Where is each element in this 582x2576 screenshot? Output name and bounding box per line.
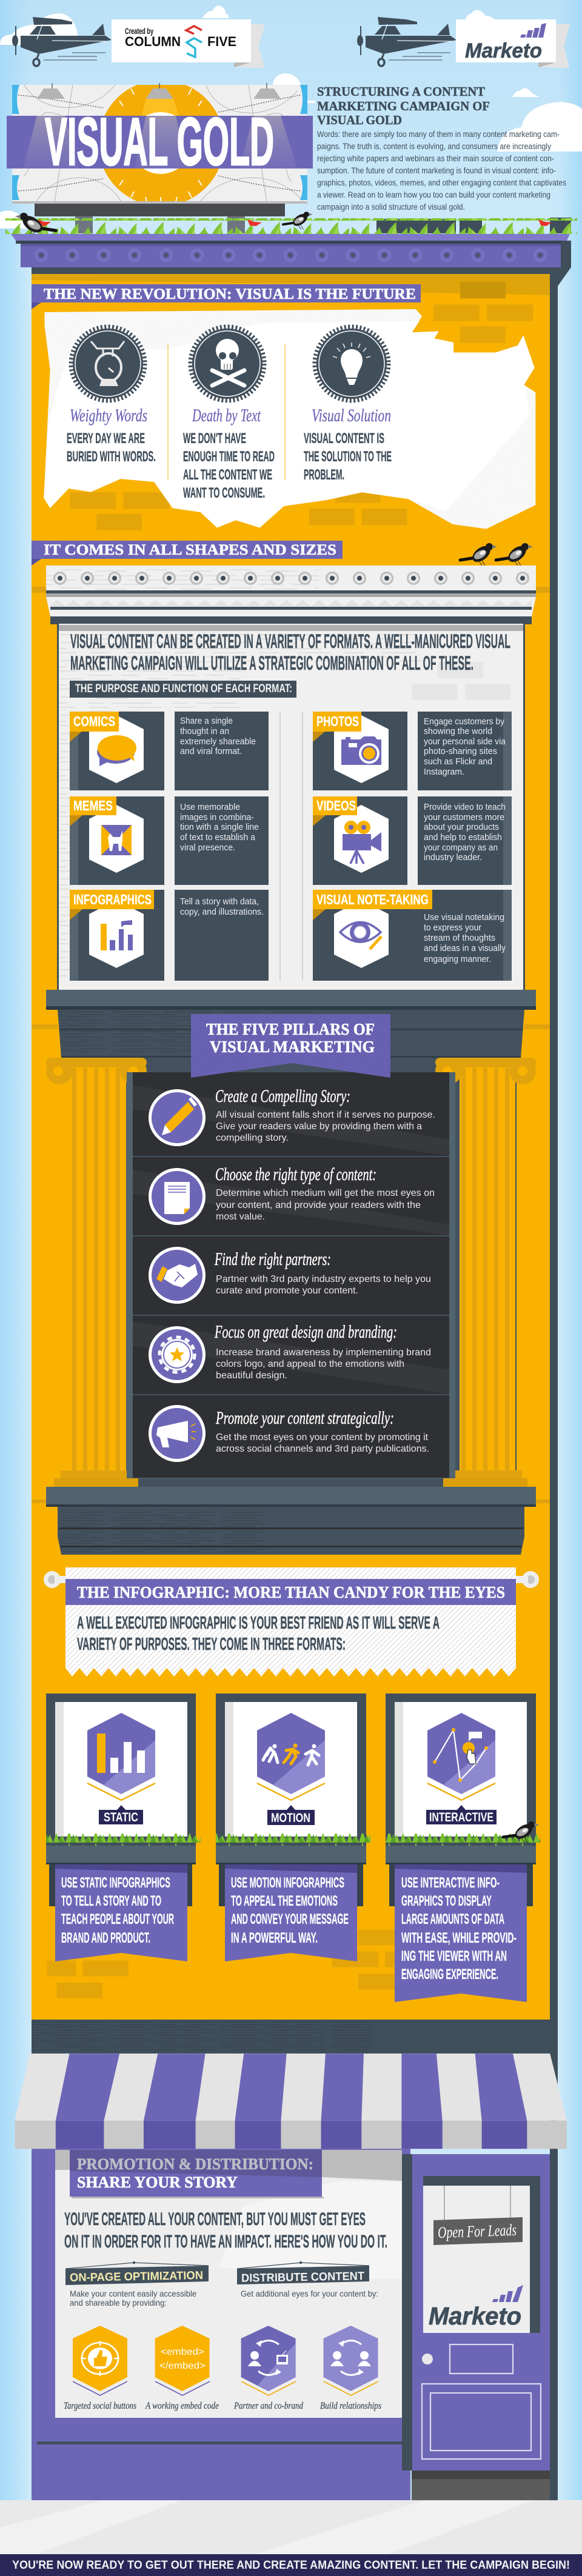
title band: [7, 104, 313, 179]
heading: the new revolution: [32, 284, 421, 309]
clouds: [0, 5, 582, 229]
panel: infographic scroll: [44, 1567, 539, 1677]
memes description: of text to establish a: [180, 832, 256, 843]
pillar 3 text: Partner with 3rd party industry experts to help you: [216, 1274, 431, 1284]
format: visual note-taking: Use visual notetaking: [424, 912, 504, 923]
badge: weighty words: [71, 327, 145, 401]
format: photos: [313, 712, 407, 790]
icon: megaphone: [150, 1406, 204, 1461]
pillars title banner: [191, 1014, 390, 1078]
pillar 2 text: most value.: [216, 1212, 265, 1222]
billboard map lines: [18, 85, 303, 202]
columns of copy: ALL THE CONTENT WE: [183, 467, 272, 483]
format: infographics: INFOGRAPHICS: [73, 892, 152, 907]
intro text: [317, 129, 566, 212]
rooftop boxes: [376, 218, 571, 233]
card: static: TEACH PEOPLE ABOUT YOUR: [61, 1911, 174, 1927]
format: comics: COMICS: [73, 713, 115, 729]
pillar 2 text: Choose the right type of content:: [215, 1164, 376, 1184]
Column Five logo: [125, 26, 236, 57]
script headings: [70, 405, 391, 425]
card: interactive: ING THE VIEWER WITH AN: [401, 1948, 507, 1964]
intro text: rejecting white papers and webinars as their main source of content con-: [317, 153, 554, 163]
photos description: photo-sharing sites: [424, 746, 497, 756]
flowers: [38, 219, 552, 227]
intro heading: [317, 84, 490, 127]
sidewalk: [0, 2500, 582, 2554]
hex: embed code: [145, 2326, 219, 2411]
panel: torn paper: [44, 309, 535, 529]
script headings: Visual Solution: [312, 405, 391, 425]
pillar 5 text: Get the most eyes on your content by promoting it: [216, 1432, 429, 1443]
panel: infographic scroll: THE INFOGRAPHIC: MORE THAN CANDY FOR THE EYES: [77, 1583, 505, 1601]
title band: VISUAL GOLD: [45, 104, 274, 179]
videos description: Provide video to teach: [424, 802, 506, 812]
badge: visual solution: [315, 327, 389, 401]
icon: document: [150, 1170, 204, 1223]
card: static: USE STATIC INFOGRAPHICS: [61, 1875, 170, 1891]
pillar 1 text: Give your readers value by providing them with a: [216, 1121, 422, 1132]
card: interactive: INTERACTIVE: [429, 1810, 493, 1824]
scroll rollers: [44, 1571, 539, 1588]
promotion heading: [70, 2150, 324, 2198]
bird on card: [503, 1821, 539, 1843]
photos description: showing the world: [424, 726, 492, 736]
on-page optimization: [65, 2261, 209, 2307]
videos description: your company as an: [424, 843, 498, 853]
intro text: campaign into a solid structure of visual gold.: [317, 202, 465, 212]
lamps: [37, 88, 281, 99]
pillar 3 text: curate and promote your content.: [216, 1286, 358, 1296]
pillar 4 text: beautiful design.: [216, 1370, 287, 1381]
door Marketo logo: Marketo: [429, 2302, 521, 2330]
hex: build relationships: [320, 2326, 381, 2411]
pillar 4 text: Focus on great design and branding:: [214, 1322, 397, 1342]
format: comics: [70, 712, 164, 790]
panel: five pillars board: [127, 1072, 455, 1478]
hex: social buttons: Targeted social buttons: [64, 2401, 136, 2411]
billboard: [7, 80, 313, 233]
pillar 2 text: your content, and provide your readers with the: [216, 1200, 421, 1210]
birds on ledge: [460, 543, 533, 567]
memes description: images in combina-: [180, 812, 254, 823]
intro heading: VISUAL GOLD: [317, 113, 402, 127]
closing banner: [0, 2554, 582, 2576]
columns of copy: VISUAL CONTENT IS: [304, 430, 384, 447]
card: interactive: ENGAGING EXPERIENCE.: [401, 1966, 498, 1983]
icon: handshake: [150, 1249, 204, 1302]
columns of copy: [67, 430, 392, 501]
distribute content: [237, 2261, 378, 2298]
columns of copy: BURIED WITH WORDS.: [67, 449, 156, 465]
on-page optimization: and shareable by providing:: [70, 2298, 167, 2307]
pillar 5 text: [215, 1408, 429, 1454]
Marketo logo: Marketo: [465, 39, 542, 62]
format: visual note-taking: engaging manner.: [424, 954, 491, 964]
format: photos: PHOTOS: [316, 713, 359, 729]
videos description: [418, 796, 512, 885]
on-page optimization: ON-PAGE OPTIMIZATION: [70, 2269, 203, 2284]
format: visual note-taking: to express your: [424, 923, 481, 933]
Marketo logo: [465, 23, 546, 62]
panel: shop window: [55, 2150, 402, 2418]
hex: embed code: </embed>: [159, 2361, 206, 2371]
pillar 4 text: Increase brand awareness by implementing brand: [216, 1347, 431, 1358]
facade rivets: [53, 572, 529, 585]
pillar 5 text: across social channels and 3rd party publications.: [216, 1444, 429, 1454]
hex: embed code: <embed>: [161, 2347, 204, 2357]
promotion heading: PROMOTION & DISTRIBUTION:: [77, 2155, 313, 2173]
icon: pencil: [150, 1091, 204, 1144]
card: motion: [216, 1693, 370, 1961]
roof cornice: [11, 234, 571, 286]
distribute content: DISTRIBUTE CONTENT: [241, 2270, 365, 2285]
heading: shapes and sizes: IT COMES IN ALL SHAPES AND SIZES: [44, 542, 336, 558]
pillar 1 text: [215, 1086, 435, 1143]
photos description: Engage customers by: [424, 716, 504, 727]
intro text: paigns. The truth is, content is evolving, and consumers are increasingly: [317, 141, 551, 151]
facade top: [32, 566, 550, 624]
format: memes: [70, 796, 164, 885]
format: videos: [313, 796, 407, 885]
photos description: Instagram.: [424, 767, 464, 777]
format: visual note-taking: VISUAL NOTE-TAKING: [316, 892, 429, 907]
columns of copy: WE DON'T HAVE: [183, 430, 246, 447]
gold sun: [103, 85, 219, 201]
script headings: Death by Text: [192, 405, 261, 425]
card: motion: AND CONVEY YOUR MESSAGE: [231, 1911, 349, 1927]
pillar 4 text: colors logo, and appeal to the emotions with: [216, 1359, 404, 1369]
awning: [15, 2054, 567, 2149]
plinth: [32, 1487, 550, 1555]
card: motion: USE MOTION INFOGRAPHICS: [231, 1875, 344, 1891]
card: motion: TO APPEAL THE EMOTIONS: [231, 1893, 338, 1909]
format: visual note-taking: stream of thoughts: [424, 933, 495, 943]
card: interactive: [386, 1693, 540, 2002]
plane with Column Five banner: [12, 17, 265, 68]
format: visual note-taking: [313, 890, 512, 981]
comics description: Share a single: [180, 716, 233, 726]
hex: partner and co-brand: Partner and co-brand: [233, 2401, 304, 2411]
videos description: about your products: [424, 822, 499, 832]
entablature: [32, 990, 550, 1504]
storefront: [15, 2020, 567, 2500]
pillar 3 text: [214, 1249, 431, 1296]
videos description: and help to establish: [424, 832, 502, 843]
promotion heading: SHARE YOUR STORY: [77, 2174, 238, 2191]
on-page optimization: Make your content easily accessible: [70, 2289, 196, 2298]
intro heading: MARKETING CAMPAIGN OF: [317, 99, 490, 113]
pillar 1 text: Create a Compelling Story:: [215, 1086, 350, 1106]
columns of copy: EVERY DAY WE ARE: [67, 430, 145, 447]
pillar 5 text: Promote your content strategically:: [215, 1408, 394, 1428]
memes description: [175, 796, 269, 885]
distribute content: Get additional eyes for your content by:: [241, 2289, 378, 2298]
comics description: and viral format.: [180, 746, 242, 756]
memes description: Use memorable: [180, 802, 240, 812]
card: static: TO TELL A STORY AND TO: [61, 1893, 161, 1909]
photos description: your personal side via: [424, 736, 506, 747]
columns of copy: ENOUGH TIME TO READ: [183, 449, 275, 465]
photos description: such as Flickr and: [424, 756, 492, 767]
formats lead text: [70, 630, 510, 674]
memes description: tion with a single line: [180, 822, 259, 832]
format: videos: VIDEOS: [316, 798, 356, 813]
format: memes: MEMES: [73, 798, 113, 813]
intro text: a viewer. Read on to learn how you too can build your content marketing: [317, 190, 550, 199]
bricks: [70, 282, 533, 530]
format: visual note-taking: and ideas in a visually: [424, 943, 506, 953]
promotion lead text: [64, 2209, 387, 2252]
hex: social buttons: [64, 2326, 136, 2411]
panel: formats: [57, 624, 525, 990]
Column Five logo: Created by: [125, 26, 153, 36]
card: static: [46, 1693, 201, 1961]
comics description: [175, 712, 269, 790]
pillar 2 text: Determine which medium will get the most eyes on: [216, 1188, 435, 1198]
infographics description: Tell a story with data,: [180, 896, 259, 907]
card: interactive: GRAPHICS TO DISPLAY: [401, 1893, 492, 1909]
badge: death by text: [190, 327, 264, 401]
comics description: extremely shareable: [180, 736, 256, 747]
format: infographics: [70, 890, 164, 981]
columns of copy: WANT TO CONSUME.: [183, 485, 265, 501]
videos description: industry leader.: [424, 852, 482, 863]
cornice rivets: [35, 249, 547, 262]
heading: shapes and sizes: [32, 541, 343, 566]
card: motion: IN A POWERFUL WAY.: [231, 1930, 318, 1946]
rooftop grass: [5, 218, 577, 234]
Column Five logo: FIVE: [207, 34, 236, 49]
door Marketo logo: [429, 2285, 523, 2330]
pillar 2 text: [215, 1164, 435, 1222]
heading: the new revolution: THE NEW REVOLUTION: VISUAL IS THE FUTURE: [44, 286, 416, 302]
Column Five logo: COLUMN: [125, 34, 181, 49]
pillars title banner: THE FIVE PILLARS OF: [206, 1020, 375, 1038]
pillar: right: [435, 1058, 536, 1487]
photos description: [418, 712, 512, 790]
videos description: your customers more: [424, 812, 504, 823]
pillar 3 text: Find the right partners:: [214, 1249, 331, 1269]
infographics description: copy, and illustrations.: [180, 907, 264, 917]
hex: partner and co-brand: [233, 2326, 304, 2411]
icon: star badge: [150, 1327, 204, 1382]
runners: [263, 1743, 319, 1765]
script headings: Weighty Words: [70, 405, 147, 425]
formats subheading: THE PURPOSE AND FUNCTION OF EACH FORMAT:: [75, 682, 292, 695]
pillar: left: [46, 1058, 147, 1487]
open for leads sign: Open For Leads: [438, 2221, 517, 2241]
card: interactive: USE INTERACTIVE INFO-: [401, 1875, 500, 1891]
open for leads sign: [433, 2186, 523, 2245]
memes description: viral presence.: [180, 843, 235, 853]
pillar 1 text: compelling story.: [216, 1133, 289, 1143]
hex: build relationships: Build relationships: [320, 2401, 381, 2411]
hex: embed code: A working embed code: [145, 2401, 219, 2411]
building wall: [32, 274, 558, 2500]
card: motion: MOTION: [271, 1811, 310, 1825]
formats subheading: [70, 681, 296, 698]
intro heading: STRUCTURING A CONTENT: [317, 84, 485, 99]
card: static: STATIC: [104, 1810, 138, 1824]
birds on roof: [15, 212, 313, 238]
infographics description: [175, 890, 269, 981]
comics description: thought in an: [180, 726, 229, 736]
shop door: [402, 2154, 550, 2500]
panel: infographic scroll: VARIETY OF PURPOSES. THEY COME IN THREE FORMATS:: [77, 1635, 346, 1654]
card: static: BRAND AND PRODUCT.: [61, 1930, 150, 1946]
columns of copy: THE SOLUTION TO THE: [304, 449, 392, 465]
pillar 1 text: All visual content falls short if it serves no purpose.: [216, 1110, 435, 1120]
plane with Marketo banner: [357, 17, 570, 68]
columns of copy: PROBLEM.: [304, 467, 344, 483]
pillar 4 text: [214, 1322, 431, 1381]
pillars title banner: VISUAL MARKETING: [210, 1038, 375, 1056]
